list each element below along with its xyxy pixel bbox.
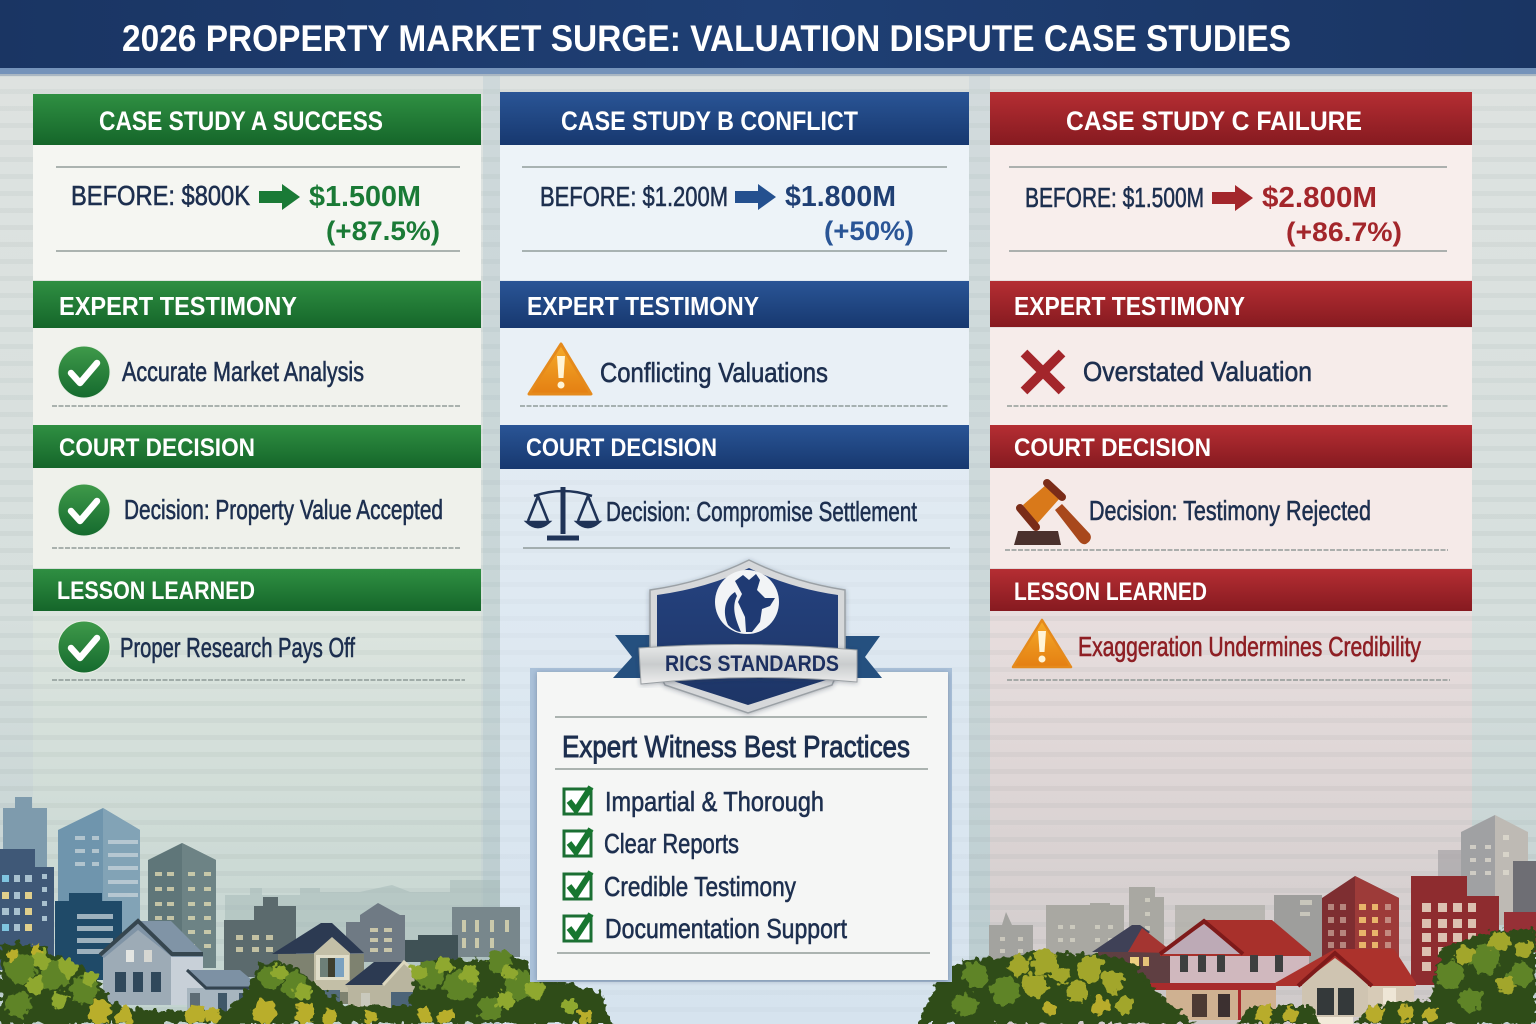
ribbon ends [613,635,660,678]
B valuation: (+50%) [824,216,914,246]
A header [33,94,481,145]
A expert testimony header [33,281,481,328]
house: dark gable [1098,952,1170,985]
C expert testimony header [990,281,1472,327]
globe emblem [715,570,779,634]
C lesson header: LESSON LEARNED [1014,578,1207,606]
B valuation: BEFORE: $1.200M [540,181,728,212]
checklist: Clear Reports [604,828,739,859]
A lesson row [52,621,465,680]
B court decision row: Decision: Compromise Settlement [606,496,917,527]
A court decision row [52,484,461,548]
RICS shield badge: RICS STANDARDS [665,651,839,676]
distant haze buildings [989,912,1033,960]
B header: CASE STUDY B CONFLICT [561,106,858,136]
house: small garage [187,988,259,1015]
best practices card [530,668,952,982]
A expert testimony row: Accurate Market Analysis [122,356,364,387]
ribbon [639,644,857,684]
icon: warning [529,344,591,394]
card heading: Expert Witness Best Practices [562,729,910,764]
C valuation: $2.800M [1262,182,1377,214]
icon: gavel [1014,483,1091,545]
B expert testimony header [500,281,969,328]
case study B [500,92,969,982]
case study A [33,94,481,680]
checklist [564,786,847,944]
A valuation: $1.500M [309,181,421,213]
C court decision row: Decision: Testimony Rejected [1089,495,1371,526]
house: tan [278,954,364,1004]
C lesson row: Exaggeration Undermines Credibility [1078,631,1421,662]
left skyline [0,797,520,1017]
A valuation [56,167,460,251]
right skyline [989,815,1536,1024]
C valuation [1009,167,1447,251]
title: 2026 PROPERTY MARKET SURGE: VALUATION DISPUTE CASE STUDIES [122,18,1291,59]
A header: CASE STUDY A SUCCESS [99,106,383,136]
C expert testimony row [1007,353,1448,406]
icon: red cross [1024,353,1062,391]
B valuation: $1.800M [785,181,896,213]
B court decision row [523,487,950,548]
B court decision header: COURT DECISION [526,434,717,462]
C lesson row [1007,620,1450,680]
A lesson header [33,569,481,611]
checklist: Impartial & Thorough [605,786,824,817]
foliage right [918,929,1536,1024]
C court decision header [990,425,1472,468]
C expert testimony row: Overstated Valuation [1083,356,1312,387]
C valuation: BEFORE: $1.500M [1025,182,1204,213]
A court decision row: Decision: Property Value Accepted [124,494,443,525]
checklist: Documentation Support [605,913,847,944]
C court decision header: COURT DECISION [1014,434,1211,462]
B expert testimony row: Conflicting Valuations [600,357,828,388]
foliage left [0,943,612,1024]
house: red roof large [1170,953,1309,985]
B header [500,92,969,145]
B valuation [522,167,947,251]
A court decision header [33,425,481,468]
checklist: Credible Testimony [604,871,796,902]
C valuation: (+86.7%) [1286,217,1402,247]
C court decision row [1005,483,1448,550]
title banner [0,0,1536,76]
B expert testimony row [520,344,948,406]
C expert testimony header: EXPERT TESTIMONY [1014,291,1245,321]
A valuation: BEFORE: $800K [71,180,250,211]
B court decision header [500,425,969,469]
house: grey gabled [103,924,172,1005]
A expert testimony header: EXPERT TESTIMONY [59,291,297,321]
RICS shield badge [613,560,882,713]
C header [990,92,1472,145]
A valuation: (+87.5%) [326,216,440,246]
shield [650,560,845,713]
C header: CASE STUDY C FAILURE [1066,106,1362,136]
C lesson header [990,569,1472,611]
A lesson row: Proper Research Pays Off [120,632,355,663]
icon: scales [527,487,599,538]
A lesson header: LESSON LEARNED [57,577,255,605]
case study C [990,92,1472,680]
house: tan with red roof [1302,982,1414,1017]
B expert testimony header: EXPERT TESTIMONY [527,291,759,321]
distant haze buildings [225,880,500,1000]
A court decision header: COURT DECISION [59,434,255,462]
A expert testimony row [52,346,461,406]
icon: warning [1013,620,1071,667]
